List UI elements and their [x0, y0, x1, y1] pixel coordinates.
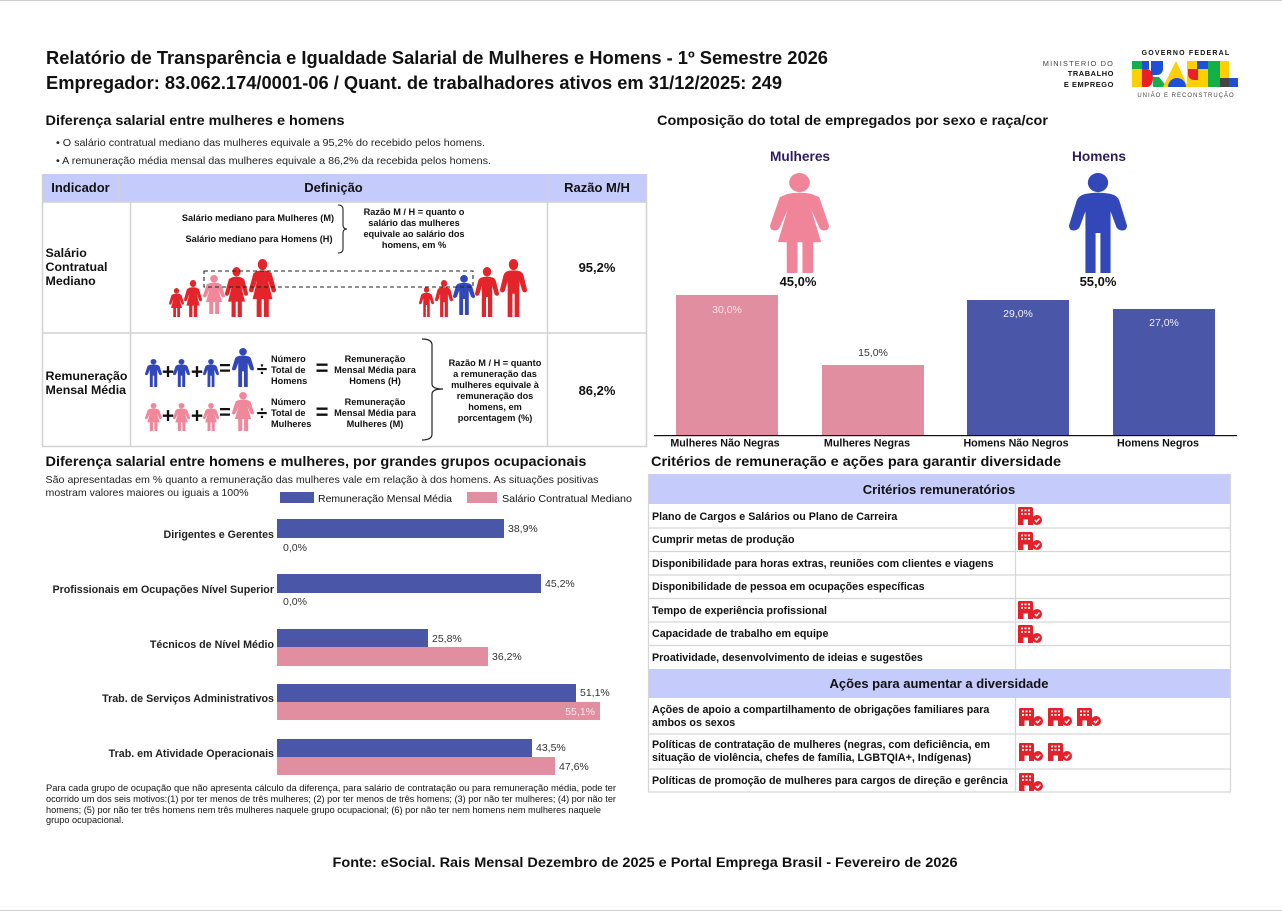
icon group: homens 55,0%: Homens	[1072, 149, 1126, 164]
title: Empregador: 83.062.174/0001-06 / Quant. de trabalhadores ativos em 31/12/2025: 249	[46, 73, 782, 93]
logo: governo federal brasil	[1132, 50, 1238, 99]
mean men formula: +	[191, 360, 203, 384]
logo: ministério do trabalho e emprego: TRABALHO	[1068, 69, 1114, 78]
footnote: Para cada grupo de ocupação que não apresenta cálculo da diferença, para salário de contratação ou para remuneração média, pode ter	[46, 783, 616, 793]
bar chart: composition: 27,0%	[1149, 317, 1179, 329]
row label: remuneração mensal média	[46, 369, 128, 397]
mean men formula: Homens	[271, 376, 307, 386]
mean women formula: +	[191, 404, 203, 428]
criteria icons	[1018, 507, 1042, 643]
logo: governo federal brasil: GOVERNO FEDERAL	[1142, 50, 1230, 57]
ratio: 86,2%: 86,2%	[579, 383, 616, 398]
group: dirigentes e gerentes: 0,0%	[283, 542, 307, 554]
mean men formula: Remuneração	[345, 354, 406, 364]
criteria rows: Disponibilidade para horas extras, reuniões com clientes e viagens	[652, 558, 994, 570]
ratio: 95,2%: 95,2%	[579, 260, 616, 275]
bullet list: • A remuneração média mensal das mulheres equivale a 86,2% da recebida pelos homens.	[56, 156, 491, 167]
group: técnicos: 36,2%	[492, 651, 522, 663]
icon group: homens 55,0%	[1069, 149, 1127, 289]
chart description	[46, 475, 598, 499]
heading: diferença salarial: Diferença salarial entre mulheres e homens	[46, 112, 345, 128]
footnote: ocorrido um dos seis motivos:(1) por ter menos de três mulheres; (2) por ter menos de três homens; (3) por não ter mulheres; (4) por não ter	[46, 794, 616, 804]
group: serviços administrativos	[102, 684, 610, 720]
section header: critérios remuneratórios: Critérios remuneratórios	[863, 482, 1015, 497]
bar chart: occupational groups	[52, 519, 610, 775]
title	[46, 48, 828, 93]
bar chart: composition: Homens Não Negros	[963, 438, 1069, 450]
bar chart: composition	[654, 295, 1237, 450]
median definition text: Razão M / H = quanto o	[364, 207, 465, 217]
logo: ministério do trabalho e emprego: E EMPREGO	[1064, 80, 1114, 89]
mean ratio explanation: porcentagem (%)	[458, 413, 532, 423]
table header: Definição	[304, 180, 363, 195]
logo: ministério do trabalho e emprego: MINISTERIO DO	[1043, 59, 1114, 68]
icon group: mulheres 45,0%	[770, 149, 830, 289]
mean women formula: =	[219, 402, 231, 424]
median definition text: equivale ao salário dos	[363, 229, 465, 239]
mean men formula: ÷	[257, 360, 267, 380]
criteria rows: Capacidade de trabalho em equipe	[652, 628, 828, 640]
mean men formula: Homens (H)	[349, 376, 401, 386]
icon group: homens 55,0%: 55,0%	[1080, 274, 1117, 289]
source: Fonte: eSocial. Rais Mensal Dezembro de 2025 e Portal Emprega Brasil - Fevereiro de 2026	[332, 855, 958, 870]
group: serviços administrativos: 55,1%	[565, 706, 595, 718]
row label: salário contratual mediano: Salário	[46, 246, 87, 260]
mean men formula: Total de	[271, 365, 306, 375]
action rows	[652, 704, 1009, 787]
criteria rows: Cumprir metas de produção	[652, 534, 795, 546]
chart legend: Salário Contratual Mediano	[502, 493, 632, 505]
chart legend: Remuneração Mensal Média	[318, 493, 452, 505]
title: Relatório de Transparência e Igualdade Salarial de Mulheres e Homens - 1º Semestre 2026	[46, 48, 828, 68]
bar chart: composition: Mulheres Negras	[824, 438, 910, 450]
action icons	[1019, 708, 1101, 791]
chart description: mostram valores maiores ou iguais a 100%	[46, 488, 248, 499]
group: profissionais: Profissionais em Ocupações Nível Superior	[52, 584, 274, 596]
bar chart: composition: Mulheres Não Negras	[670, 438, 780, 450]
bullet list	[56, 138, 491, 167]
group: atividade operacional: 47,6%	[559, 761, 589, 773]
row label: remuneração mensal média: Remuneração	[46, 369, 128, 383]
mean ratio explanation: a remuneração das	[453, 369, 537, 379]
bar chart: composition: 29,0%	[1003, 308, 1033, 320]
criteria rows	[652, 511, 994, 664]
table header: Razão M/H	[564, 180, 630, 195]
group: serviços administrativos: Trab. de Serviços Administrativos	[102, 693, 274, 705]
chart description: São apresentadas em % quanto a remuneração das mulheres vale em relação à dos homens. As situações positivas	[46, 475, 598, 486]
heading: critérios: Critérios de remuneração e ações para garantir diversidade	[651, 453, 1061, 469]
action rows: Ações de apoio a compartilhamento de obrigações familiares para	[652, 704, 990, 716]
group: dirigentes e gerentes	[164, 519, 538, 554]
mean men formula: +	[162, 360, 174, 384]
heading: composição: Composição do total de empregados por sexo e raça/cor	[657, 112, 1049, 128]
action rows: ambos os sexos	[652, 717, 735, 729]
action rows: Políticas de contratação de mulheres (negras, com deficiência, em	[652, 739, 990, 751]
group: técnicos: 25,8%	[432, 633, 462, 645]
mean women formula: =	[316, 400, 328, 424]
mean women formula: ÷	[257, 404, 267, 424]
panel: indicator table	[42, 174, 647, 447]
criteria rows: Disponibilidade de pessoa em ocupações específicas	[652, 581, 925, 593]
mean ratio explanation: mulheres equivale à	[451, 380, 540, 390]
mean men formula: Número	[271, 354, 306, 364]
median definition text: Salário mediano para Homens (H)	[185, 234, 333, 244]
icon group: mulheres 45,0%: 45,0%	[780, 274, 817, 289]
footnote	[46, 783, 616, 825]
footnote: homens; (5) por não ter três homens nem três mulheres naquele grupo ocupacional; (6) por não ter nem homens nem mulheres naquele	[46, 805, 601, 815]
median definition text: salário das mulheres	[368, 218, 460, 228]
group: técnicos: Técnicos de Nível Médio	[150, 639, 274, 651]
mean women formula: Número	[271, 397, 306, 407]
group: atividade operacional: Trab. em Atividade Operacionais	[109, 748, 274, 760]
heading: diferença por grupos: Diferença salarial entre homens e mulheres, por grandes grupos ocupacionais	[46, 453, 587, 469]
criteria rows: Tempo de experiência profissional	[652, 605, 827, 617]
mean ratio explanation: remuneração dos	[457, 391, 533, 401]
mean ratio explanation: homens, em	[468, 402, 522, 412]
criteria rows: Proatividade, desenvolvimento de ideias e sugestões	[652, 652, 923, 664]
median definition text: homens, em %	[382, 240, 446, 250]
mean women formula: Total de	[271, 408, 306, 418]
bar chart: composition: 15,0%	[858, 347, 888, 359]
table header	[51, 180, 630, 195]
mean women formula: Mulheres (M)	[347, 419, 403, 429]
chart legend	[280, 492, 632, 505]
mean women formula: Mensal Média para	[334, 408, 417, 418]
action rows: situação de violência, chefes de família, LGBTQIA+, Indígenas)	[652, 752, 972, 764]
footnote: grupo ocupacional.	[46, 815, 124, 825]
mean men formula: =	[219, 358, 231, 380]
row label: remuneração mensal média: Mensal Média	[46, 383, 126, 397]
group: profissionais: 45,2%	[545, 578, 575, 590]
table header: Indicador	[51, 180, 110, 195]
mean women formula: Mulheres	[271, 419, 311, 429]
logo: governo federal brasil: UNIÃO E RECONSTRUÇÃO	[1137, 92, 1235, 99]
criteria rows: Plano de Cargos e Salários ou Plano de Carreira	[652, 511, 898, 523]
mean women formula: Remuneração	[345, 397, 406, 407]
action rows: Políticas de promoção de mulheres para cargos de direção e gerência	[652, 775, 1009, 787]
icon group: mulheres 45,0%: Mulheres	[770, 149, 830, 164]
median people illustration	[169, 259, 527, 317]
panel: criteria table	[648, 474, 1231, 792]
mean ratio explanation	[422, 339, 542, 440]
mean men formula: =	[316, 356, 328, 380]
mean men formula	[145, 348, 417, 387]
median definition text: Salário mediano para Mulheres (M)	[182, 213, 334, 223]
group: profissionais: 0,0%	[283, 596, 307, 608]
group: atividade operacional: 43,5%	[536, 742, 566, 754]
bar chart: composition: 30,0%	[712, 304, 742, 316]
group: profissionais	[52, 574, 575, 608]
mean women formula	[145, 392, 417, 431]
group: serviços administrativos: 51,1%	[580, 687, 610, 699]
group: dirigentes e gerentes: Dirigentes e Gerentes	[164, 529, 274, 541]
mean men formula: Mensal Média para	[334, 365, 417, 375]
group: dirigentes e gerentes: 38,9%	[508, 523, 538, 535]
mean ratio explanation: Razão M / H = quanto	[449, 358, 542, 368]
median definition text	[182, 205, 465, 253]
bullet list: • O salário contratual mediano das mulheres equivale a 95,2% do recebido pelos homens.	[56, 138, 485, 149]
row label: salário contratual mediano: Contratual	[46, 260, 107, 274]
logo: ministério do trabalho e emprego	[1043, 59, 1114, 89]
section header: ações: Ações para aumentar a diversidade	[830, 676, 1048, 691]
mean women formula: +	[162, 404, 174, 428]
bar chart: composition: Homens Negros	[1117, 438, 1199, 450]
row label: salário contratual mediano	[46, 246, 107, 288]
row label: salário contratual mediano: Mediano	[46, 274, 96, 288]
group: técnicos	[150, 629, 522, 666]
group: atividade operacional	[109, 739, 589, 775]
